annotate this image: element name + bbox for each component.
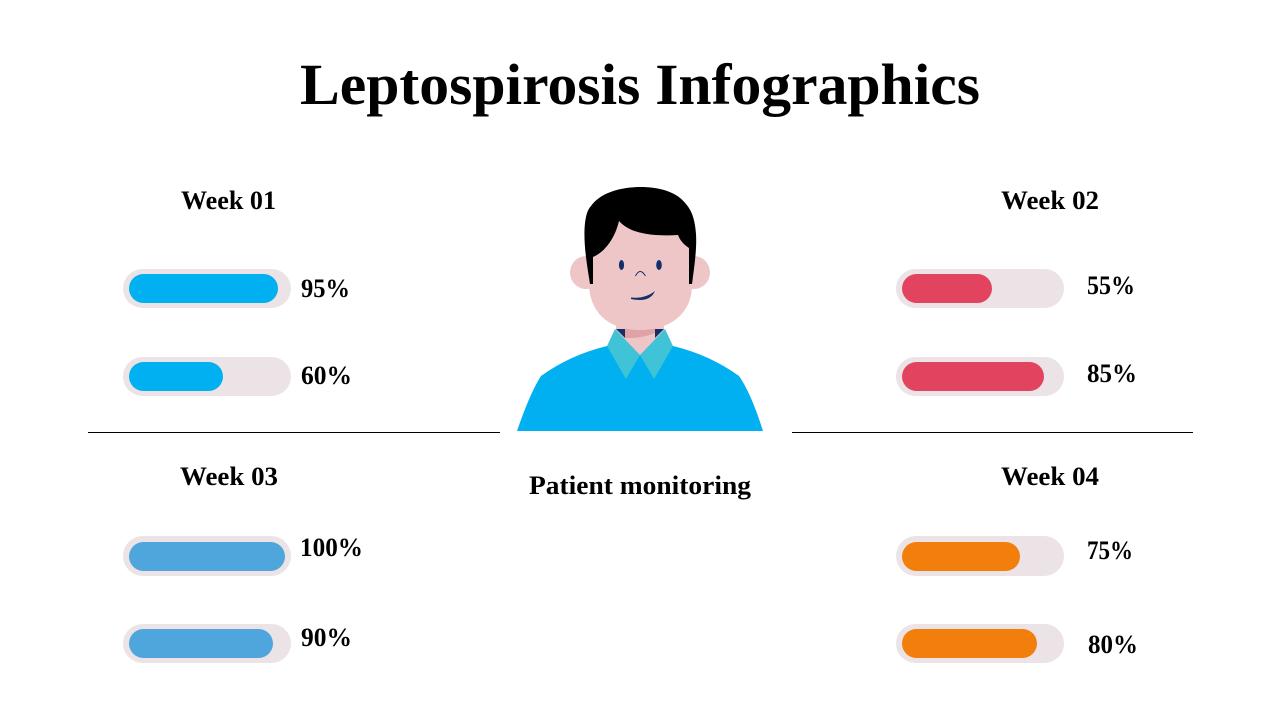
bar: week 01 60% bbox=[123, 357, 291, 396]
bar: week 04 80% bbox=[896, 624, 1064, 663]
neck shadow and collar inner bbox=[616, 328, 664, 338]
bar: week 03 100% bbox=[123, 536, 291, 576]
bar: week 01 95% bbox=[123, 269, 291, 308]
bar: week 02 85% bbox=[896, 357, 1064, 396]
ears bbox=[570, 256, 710, 289]
value: 60%: 60% bbox=[301, 361, 352, 390]
hair bbox=[584, 187, 696, 284]
mouth bbox=[631, 291, 655, 300]
panel: week 02 bbox=[896, 186, 1137, 396]
icon: patient illustration bbox=[517, 187, 763, 431]
value: 80%: 80% bbox=[1088, 630, 1138, 659]
value: 85%: 85% bbox=[1087, 359, 1137, 388]
nose bbox=[636, 272, 646, 276]
heading: week 02: Week 02 bbox=[1001, 186, 1099, 215]
shirt bbox=[517, 346, 763, 431]
heading: week 03: Week 03 bbox=[180, 462, 278, 491]
heading: week 04: Week 04 bbox=[1001, 462, 1099, 491]
bar: week 02 55% bbox=[896, 269, 1064, 308]
heading: week 01: Week 01 bbox=[181, 186, 276, 215]
collar bbox=[607, 329, 673, 379]
value: 75%: 75% bbox=[1087, 536, 1133, 565]
value: 55%: 55% bbox=[1087, 271, 1135, 300]
value: 100%: 100% bbox=[300, 533, 363, 562]
bar: week 03 90% bbox=[123, 624, 291, 663]
panel: week 04 bbox=[896, 462, 1138, 663]
eyes bbox=[619, 260, 662, 270]
face bbox=[588, 195, 692, 330]
caption: patient monitoring: Patient monitoring bbox=[529, 471, 751, 500]
panel: week 01 bbox=[123, 186, 352, 396]
value: 95%: 95% bbox=[301, 274, 350, 303]
bar: week 04 75% bbox=[896, 536, 1064, 576]
title: Leptospirosis Infographics bbox=[300, 52, 980, 117]
panel: week 03 bbox=[123, 462, 363, 663]
value: 90%: 90% bbox=[301, 623, 352, 652]
neck bbox=[616, 322, 664, 356]
